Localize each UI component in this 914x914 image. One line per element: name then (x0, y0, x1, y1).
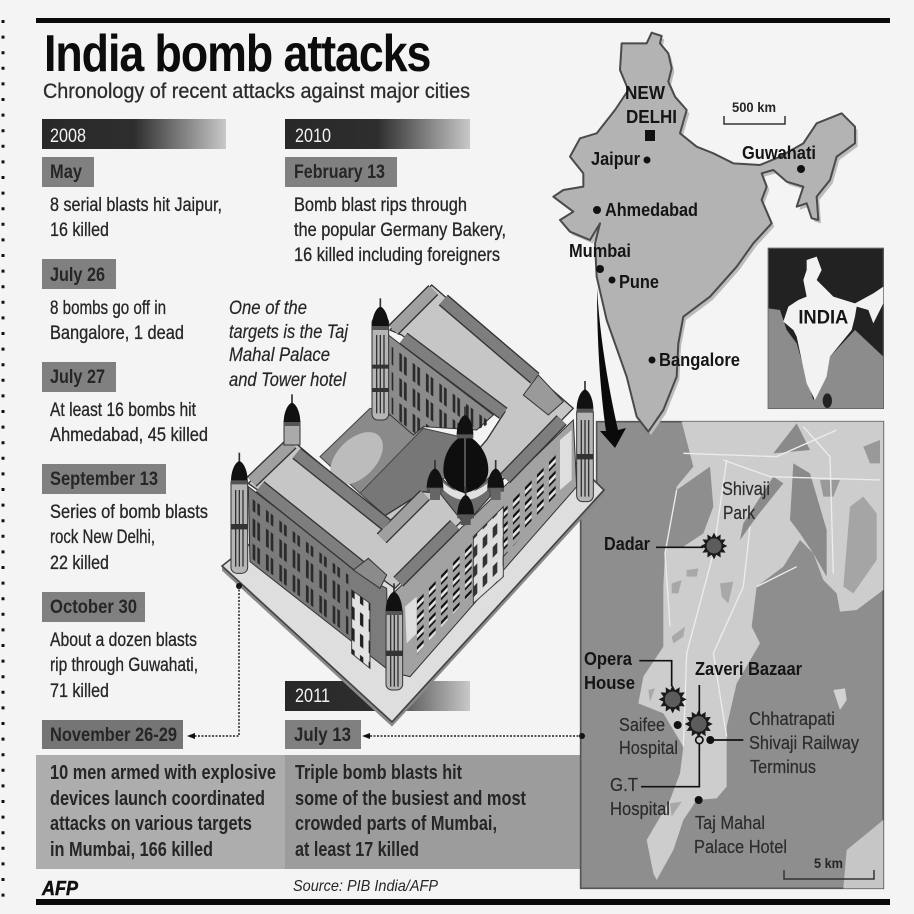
year bar 2011: 2011 (295, 686, 330, 707)
October 30 entry (42, 592, 198, 702)
February 13 entry (285, 157, 506, 266)
city dots (593, 156, 805, 364)
panel: July 2011 description: crowded parts of Mumbai, (295, 813, 497, 835)
central dome (427, 407, 504, 525)
roof (248, 285, 573, 588)
July 26 entry: Bangalore, 1 dead (50, 323, 184, 344)
blast: Opera House (659, 685, 687, 713)
February 13 entry: Bomb blast rips through (294, 195, 467, 216)
map labels: Guwahati (742, 143, 816, 163)
roads (665, 427, 880, 747)
Mumbai labels: Terminus (750, 757, 816, 777)
November 26-29 tag: November 26-29 (50, 725, 177, 746)
Mumbai labels: Taj Mahal (695, 813, 765, 833)
panel: July 2011 description: Triple bomb blasts hit (295, 762, 462, 784)
map labels: Ahmedabad (605, 200, 698, 220)
year bar 2010 (285, 119, 470, 149)
hotel caption: One of the (229, 298, 307, 319)
panel: July 2011 description: at least 17 killed (295, 839, 419, 861)
February 13 entry: the popular Germany Bakery, (294, 220, 506, 241)
hotel caption: targets is the Taj (229, 322, 349, 343)
arrow: Mumbai to city map (597, 288, 626, 448)
leader lines (639, 547, 743, 787)
year bar 2008: 2008 (50, 126, 86, 147)
left wall (248, 487, 388, 670)
land patches (648, 568, 733, 817)
bottom rule (36, 899, 890, 905)
India map (553, 33, 858, 435)
dotted left edge (2, 20, 4, 905)
July 26 entry: 8 bombs go off in (50, 298, 166, 319)
Mumbai labels: House (584, 673, 635, 693)
September 13 entry (42, 464, 208, 574)
July 26 entry: July 26 (50, 265, 105, 286)
location dots (674, 721, 714, 804)
panel: 2010 chronology (285, 119, 506, 266)
AFP logo: AFP (41, 878, 79, 900)
hotel caption (229, 298, 349, 391)
hotel caption: Mahal Palace (229, 345, 330, 366)
locator inset (768, 248, 883, 408)
Mumbai labels (584, 479, 859, 857)
towers (231, 298, 593, 690)
February 13 entry: February 13 (294, 162, 385, 183)
July 27 entry (42, 362, 208, 446)
July 13 tag (285, 720, 361, 749)
November 26-29 tag (42, 720, 183, 749)
Mumbai labels: G.T (610, 775, 638, 795)
arrow: hotel to November 26-29 (187, 583, 242, 739)
panel: July 2011 description (285, 755, 581, 869)
July 27 entry: July 27 (50, 367, 105, 388)
country outline (553, 33, 855, 432)
scale: 5 km (784, 855, 874, 879)
Mumbai labels: Dadar (604, 534, 650, 554)
Mumbai labels: Hospital (619, 738, 678, 758)
year bar 2010: 2010 (295, 126, 331, 147)
roof ridges (252, 290, 562, 582)
scale: 500 km (724, 99, 785, 124)
Mumbai labels: Chhatrapati (749, 709, 835, 729)
back wing facade (388, 335, 493, 435)
map labels: Bangalore (659, 350, 740, 370)
hotel caption: and Tower hotel (229, 370, 347, 391)
right wall (395, 420, 577, 677)
October 30 entry: About a dozen blasts (50, 630, 197, 651)
arrow: Mumbai map to July 13 (362, 733, 585, 739)
panel: November 2008 description: 10 men armed with explosive (50, 762, 276, 784)
October 30 entry: rip through Guwahati, (50, 655, 198, 676)
Mumbai labels: Shivaji (722, 479, 770, 499)
title: India bomb attacks (44, 25, 430, 83)
land (638, 422, 883, 880)
panel: November 2008 description: in Mumbai, 166 killed (50, 839, 213, 861)
September 13 entry: Series of bomb blasts (50, 502, 208, 523)
map labels: NEW (625, 83, 665, 103)
map labels: Jaipur (591, 149, 640, 169)
gables (353, 558, 387, 588)
map labels: DELHI (626, 107, 677, 127)
Mumbai labels: Park (723, 503, 756, 523)
subtitle: Chronology of recent attacks against major cities (43, 80, 470, 103)
map labels (569, 83, 816, 370)
May entry: 16 killed (50, 220, 109, 241)
blast: Dadar (701, 533, 727, 559)
locator inset: INDIA (798, 307, 848, 328)
May entry (42, 157, 222, 241)
May entry: 8 serial blasts hit Jaipur, (50, 195, 222, 216)
Mumbai map (581, 422, 883, 888)
scale: 500 km: 500 km (732, 99, 776, 115)
panel: November 2008 description: attacks on various targets (50, 813, 252, 835)
map labels: Pune (619, 272, 659, 292)
July 13 tag: July 13 (294, 725, 351, 746)
illustration: Taj Mahal Palace hotel (222, 285, 604, 727)
year bar 2011 (285, 681, 470, 711)
Mumbai labels: Opera (584, 649, 633, 669)
capital marker: New Delhi (645, 130, 655, 141)
courtyard (320, 408, 423, 493)
panel: November 2008 description (36, 755, 285, 869)
July 27 entry: Ahmedabad, 45 killed (50, 425, 208, 446)
October 30 entry: October 30 (50, 597, 137, 618)
July 27 entry: At least 16 bombs hit (50, 400, 197, 421)
Mumbai labels: Saifee (619, 715, 665, 735)
year bar 2008 (42, 119, 226, 149)
September 13 entry: rock New Delhi, (50, 527, 155, 548)
July 26 entry (42, 259, 184, 344)
October 30 entry: 71 killed (50, 681, 109, 702)
September 13 entry: September 13 (50, 469, 158, 490)
scale: 5 km: 5 km (814, 855, 843, 871)
source: Source: PIB India/AFP (293, 878, 438, 895)
February 13 entry: 16 killed including foreigners (294, 245, 500, 266)
Mumbai labels: Zaveri Bazaar (695, 659, 802, 679)
May entry: May (50, 162, 82, 183)
September 13 entry: 22 killed (50, 553, 109, 574)
Mumbai labels: Palace Hotel (694, 837, 787, 857)
panel: July 2011 description: some of the busiest and most (295, 788, 526, 810)
Mumbai labels: Hospital (610, 799, 670, 819)
map labels: Mumbai (569, 241, 631, 261)
blast: Zaveri Bazaar (685, 710, 713, 738)
panel: November 2008 description: devices launch coordinated (50, 788, 265, 810)
top rule (36, 18, 890, 23)
panel: 2008 chronology (42, 119, 226, 702)
Mumbai labels: Shivaji Railway (749, 733, 859, 753)
